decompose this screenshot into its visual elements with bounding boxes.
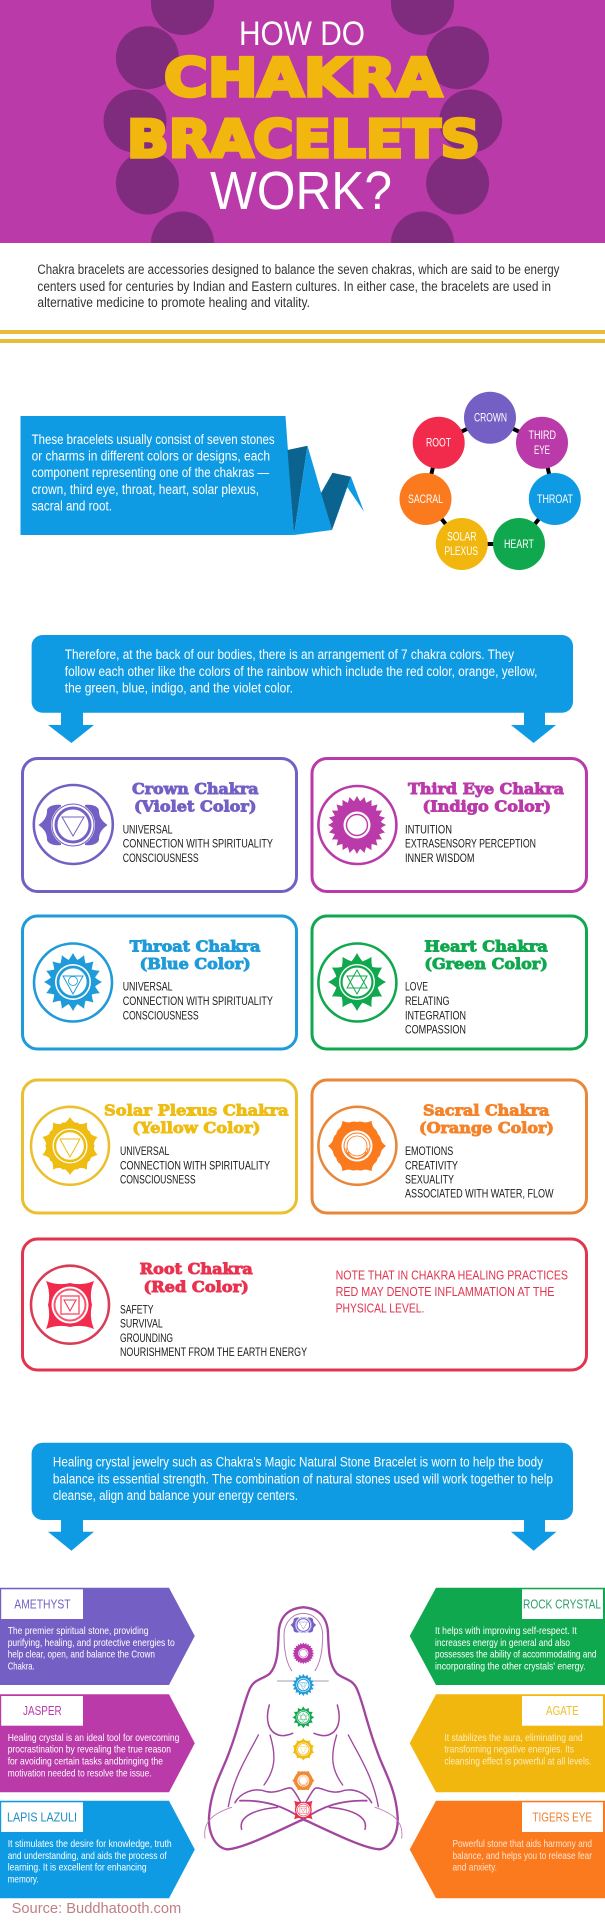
bead labels: THROAT [537,494,573,506]
origami bird panel [20,416,364,535]
card list: EMOTIONS [405,1144,453,1158]
card list: CONNECTION WITH SPIRITUALITY [120,1158,270,1172]
callout: healing crystal jewelry [32,1443,573,1551]
description [8,1732,180,1780]
panel: amethyst [0,1588,195,1685]
figure chakra: crown [290,1617,316,1633]
card list: CONNECTION WITH SPIRITUALITY [123,994,273,1008]
callout text: Healing crystal jewelry such as Chakra's Magic Natural Stone Bracelet is worn to help the body [53,1455,543,1470]
label: AGATE [546,1703,579,1718]
card: third eye chakra [312,758,586,892]
card list: INNER WISDOM [405,851,474,865]
card heading: (Orange Color) [419,1119,554,1137]
card heading: Crown Chakra [132,780,259,798]
card heading: Solar Plexus Chakra [104,1101,289,1119]
description [435,1625,597,1673]
header banner [0,0,605,243]
red note: RED MAY DENOTE INFLAMMATION AT THE [336,1284,555,1299]
description: memory. [8,1874,39,1886]
figure chakra: heart [292,1706,314,1728]
callout text: follow each other like the colors of the rainbow which include the red color, orange, yellow, [65,664,537,679]
panel text: These bracelets usually consist of seven stones [32,432,275,447]
description [8,1838,172,1886]
description: for avoiding certain tasks andbringing the [8,1756,163,1768]
bead labels: HEART [504,539,534,551]
callout text: Therefore, at the back of our bodies, there is an arrangement of 7 chakra colors. They [65,647,514,662]
red note [336,1267,568,1316]
figure chakra: root [294,1801,313,1819]
card heading: Sacral Chakra [423,1101,550,1119]
card heading [140,1260,253,1296]
seven chakra bracelet diagram [400,392,581,570]
title: WORK? [210,161,392,221]
card list [120,1302,307,1359]
description: Healing crystal is an ideal tool for overcoming [8,1732,180,1744]
panel: rock crystal [410,1588,605,1685]
card heading [419,1101,554,1137]
card heading [104,1101,289,1137]
card list: INTEGRATION [405,1008,466,1022]
card list: UNIVERSAL [123,980,173,994]
title: CHAKRA [164,48,442,109]
icon: crown chakra [38,803,108,847]
card list: EXTRASENSORY PERCEPTION [405,837,536,851]
panel text: crown, third eye, throat, heart, solar plexus, [32,482,259,497]
source line: Source: Buddhatooth.com [12,1901,181,1917]
card heading: Third Eye Chakra [408,780,564,798]
card heading: (Blue Color) [140,955,251,973]
description [452,1838,592,1874]
card list: GROUNDING [120,1331,173,1345]
figure chakra: solar plexus [291,1738,315,1761]
card list: UNIVERSAL [123,822,173,836]
arrow right [511,1519,556,1551]
card list: ASSOCIATED WITH WATER, FLOW [405,1187,554,1201]
card list: SURVIVAL [120,1317,163,1331]
label: AMETHYST [14,1596,71,1611]
description: transforming negative energies. Its [444,1744,574,1756]
red note: PHYSICAL LEVEL. [336,1301,424,1316]
panel: tigers eye [410,1801,605,1898]
bead labels [408,413,573,558]
callout text: the green, blue, indigo, and the violet color. [65,681,293,696]
description: motivation needed to resolve the issue. [8,1768,152,1780]
card heading: (Yellow Color) [132,1119,260,1137]
description: increases energy in general and also [435,1637,570,1649]
card: crown chakra [22,758,296,892]
card: sacral chakra [312,1080,586,1213]
label: JASPER [23,1703,62,1718]
card list: CONSCIOUSNESS [123,851,199,865]
card list [120,1144,270,1186]
figure chakra: throat [292,1674,315,1696]
card list [123,980,273,1022]
card list [405,1144,554,1201]
card: solar plexus chakra [22,1080,296,1213]
callout: rainbow arrangement [32,635,573,743]
card heading: (Indigo Color) [422,798,551,816]
figure chakra: sacral [292,1768,314,1793]
panel: agate [410,1694,605,1792]
panel text: sacral and root. [32,499,112,514]
panel text: component representing one of the chakras — [32,465,269,480]
card list: CREATIVITY [405,1158,458,1172]
card list: UNIVERSAL [120,1144,170,1158]
card heading: (Violet Color) [134,798,256,816]
card list: CONNECTION WITH SPIRITUALITY [123,837,273,851]
intro paragraph [37,262,560,310]
card heading [424,937,548,973]
card: heart chakra [312,916,586,1049]
label: LAPIS LAZULI [7,1810,77,1825]
bead labels: ROOT [426,438,451,450]
card list: SAFETY [120,1302,154,1316]
bead labels: SOLAR [447,532,476,544]
card heading: Root Chakra [140,1260,253,1278]
card list: RELATING [405,994,450,1008]
panel: jasper [0,1694,195,1792]
description [444,1732,591,1768]
bracelet beads [104,0,502,243]
card list: CONSCIOUSNESS [123,1008,199,1022]
icon: root chakra [46,1281,94,1329]
description: purifying, healing, and protective energies to [8,1637,175,1649]
description: The premier spiritual stone, providing [8,1625,149,1637]
icon: sacral chakra [328,1114,386,1178]
description: help clear, open, and balance the Crown [8,1649,155,1661]
card list: INTUITION [405,822,452,836]
icon: throat chakra [43,952,103,1012]
callout text: cleanse, align and balance your energy centers. [53,1488,298,1503]
panel text: or charms in different colors or designs, each [32,449,270,464]
panel text [32,432,275,514]
icon: solar plexus chakra [39,1116,101,1176]
description: procrastination by revealing the true reason [8,1744,171,1756]
description: learning. It is excellent for enhancing [8,1862,147,1874]
callout text [53,1455,553,1503]
meditating figure with chakras [205,1607,402,1849]
bead labels: CROWN [474,413,507,425]
card: throat chakra [22,916,296,1049]
bead labels: EYE [534,445,550,457]
card heading [130,937,261,973]
card list: LOVE [405,980,428,994]
card list: SEXUALITY [405,1172,454,1186]
description: It helps with improving self-respect. It [435,1625,577,1637]
card list [405,980,466,1036]
bead labels: SACRAL [408,494,443,506]
arrow right [511,712,556,743]
card heading [132,780,259,816]
title [127,15,480,221]
callout text [65,647,537,696]
card list: CONSCIOUSNESS [120,1172,196,1186]
panel: lapis lazuli [0,1801,195,1898]
card heading: Throat Chakra [130,937,261,955]
card: root chakra [22,1239,586,1370]
bead labels: THIRD [528,430,556,442]
intro paragraph: alternative medicine to promote healing and vitality. [37,295,310,310]
bead labels: PLEXUS [444,546,478,558]
arrow left [48,1519,94,1551]
card heading: (Red Color) [144,1278,249,1296]
arrow left [48,712,94,743]
figure chakra: third eye [290,1640,317,1667]
card heading: (Green Color) [424,955,548,973]
description: and anxiety. [452,1862,497,1874]
icon: heart chakra [328,953,386,1011]
description: and understanding, and aids the process of [8,1850,167,1862]
description: Chakra. [8,1661,35,1673]
card list [123,822,273,865]
card list: NOURISHMENT FROM THE EARTH ENERGY [120,1345,307,1359]
description [8,1625,175,1673]
title: HOW DO [239,15,365,53]
icon: third eye chakra [321,789,393,861]
card list: COMPASSION [405,1022,466,1036]
card list [405,822,536,865]
card heading [408,780,564,816]
card heading: Heart Chakra [424,937,548,955]
title: BRACELETS [127,110,480,170]
description: It stimulates the desire for knowledge, truth [8,1838,172,1850]
